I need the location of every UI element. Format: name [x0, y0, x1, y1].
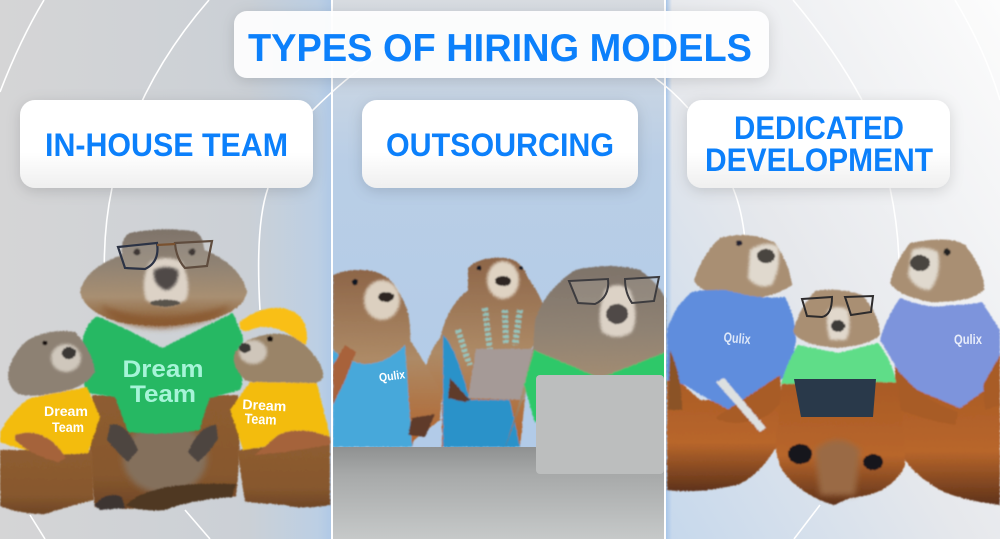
group: in-house team marmots [80, 229, 247, 510]
panel: in-house team background [0, 0, 331, 539]
title: TYPES OF HIRING MODELS [248, 27, 752, 70]
shirt text: Dream Team: Dream [122, 356, 204, 383]
left marmot body [667, 370, 780, 491]
right shirt text [241, 396, 287, 428]
right shirt text: Team [244, 410, 277, 428]
panel: dedicated development background [666, 0, 1000, 539]
left blue polo [667, 290, 796, 410]
tank text: Qulix: Qulix [378, 367, 406, 385]
label: dedicated development [687, 100, 950, 188]
big marmot glasses [118, 241, 212, 269]
big marmot body [90, 395, 240, 509]
right shirt text: Dream [242, 396, 287, 414]
group: dedicated development marmots [667, 235, 1000, 505]
left small marmot [0, 331, 100, 514]
laptop [536, 375, 664, 474]
right small marmot [230, 308, 330, 508]
label: in-house team [20, 100, 313, 188]
center glasses [802, 296, 873, 317]
right marmot head [890, 239, 984, 302]
center marmot body [776, 380, 905, 505]
panel: outsourcing background [333, 0, 664, 539]
label: outsourcing [362, 100, 638, 188]
table [333, 447, 664, 539]
green polo shirt [81, 313, 243, 434]
divider lines [331, 0, 666, 539]
title [234, 11, 769, 78]
right marmot glasses [569, 277, 659, 304]
center head [793, 290, 880, 348]
big marmot paws [107, 424, 218, 462]
left marmot head [694, 235, 792, 298]
left shirt text: Team [52, 419, 84, 435]
tablet [468, 349, 540, 400]
green polo [781, 343, 896, 384]
left shirt text [44, 403, 88, 435]
label: dedicated development: DEVELOPMENT [705, 142, 933, 178]
right blue polo [880, 298, 1000, 408]
label: in-house team: IN-HOUSE TEAM [45, 127, 288, 163]
label: outsourcing: OUTSOURCING [386, 127, 614, 163]
shirt text: Dream Team: Team [130, 381, 196, 408]
big marmot head [80, 229, 247, 326]
center tablet [794, 379, 876, 417]
blue apron [443, 335, 520, 447]
polo text: Qulix [954, 331, 982, 347]
wrench [716, 378, 766, 432]
shirt text: Dream Team [122, 356, 204, 408]
left shirt text: Dream [44, 403, 88, 419]
group: outsourcing marmots and desk [333, 258, 666, 448]
right marmot with glasses [505, 266, 666, 448]
left marmot [333, 270, 442, 447]
polo text: Qulix [723, 329, 751, 347]
label: dedicated development: DEDICATED [734, 110, 904, 146]
right marmot body [895, 370, 1000, 505]
middle marmot [424, 258, 548, 447]
left arm [715, 375, 782, 423]
